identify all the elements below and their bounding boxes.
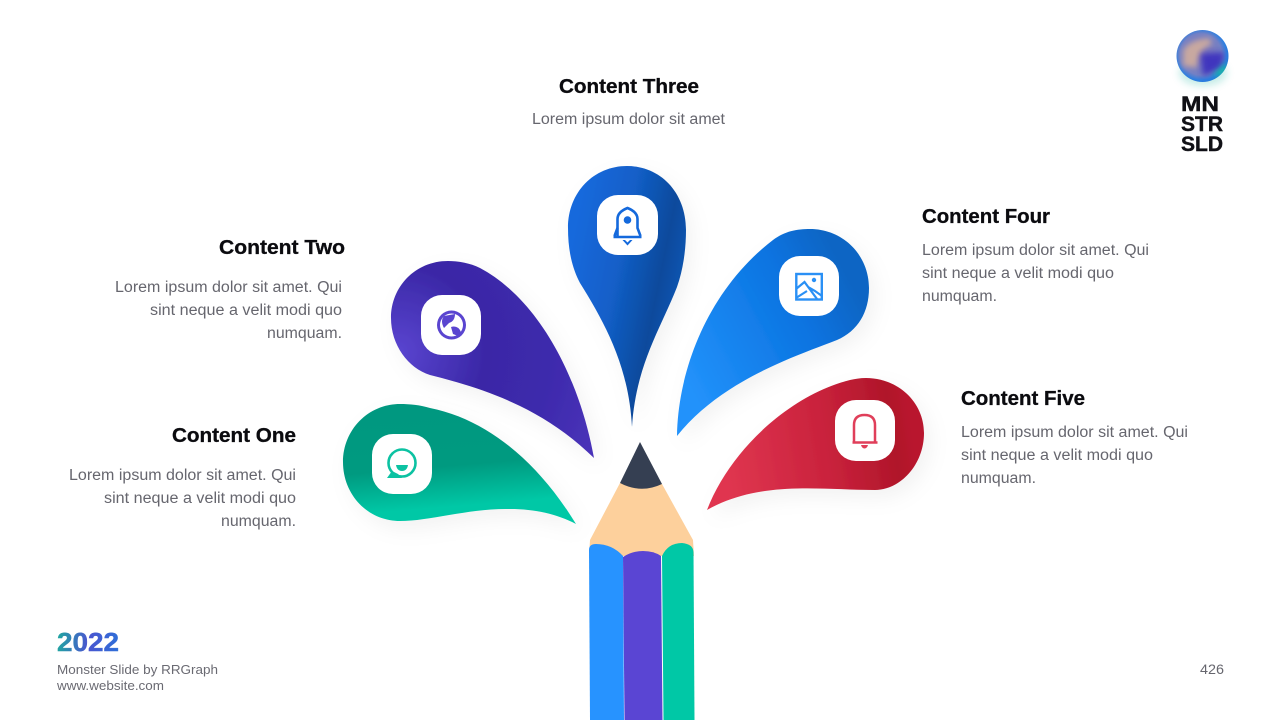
pencil stripe: purple (623, 551, 662, 720)
logo: wordmark: MN (1181, 92, 1219, 116)
logo: sphere (1176, 30, 1228, 86)
text: Content Four body: sint neque a velit modi quo (922, 265, 1114, 282)
text: Content Two body (115, 279, 342, 342)
text: Content Five body: numquam. (961, 470, 1036, 487)
petal: Content One (green) (343, 404, 576, 524)
petal: Content Five (red) (707, 378, 924, 510)
pencil lead (620, 442, 662, 489)
text: Content Two body: numquam. (267, 325, 342, 342)
logo: wordmark: SLD (1181, 132, 1223, 156)
petal: Content Two (purple) (391, 261, 594, 458)
text: Content Four body: numquam. (922, 288, 997, 305)
text: Content One body (69, 467, 296, 530)
heading: Content Three: Content Three (559, 76, 699, 98)
icon: image (779, 256, 839, 316)
petal: Content Three (blue) (568, 166, 686, 427)
heading: Content Four: Content Four (922, 206, 1050, 228)
pencil stripe: blue (589, 544, 624, 720)
text: Content Four body: Lorem ipsum dolor sit amet. Qui (922, 242, 1149, 259)
pencil wood (589, 483, 694, 556)
pencil (589, 442, 694, 720)
icon: chat (372, 434, 432, 494)
text: Content Five body (961, 424, 1188, 487)
footer: credit (56, 662, 218, 693)
heading: Content One: Content One (172, 425, 296, 447)
page number: 426 (1200, 661, 1224, 677)
text: Content Two body: Lorem ipsum dolor sit amet. Qui (115, 279, 342, 296)
petal: Content Four (blue) (677, 229, 869, 436)
text: Content One body: Lorem ipsum dolor sit amet. Qui (69, 467, 296, 484)
text: Content Three body: Lorem ipsum dolor sit amet (532, 111, 726, 128)
text: Content One body: sint neque a velit modi quo (104, 490, 296, 507)
heading: Content Two: Content Two (219, 237, 345, 259)
text: Content One body: numquam. (221, 513, 296, 530)
text: Content Five body: sint neque a velit modi quo (961, 447, 1153, 464)
footer: year: 2022 (57, 627, 119, 657)
text: Content Four body (922, 242, 1149, 305)
icon: globe (421, 295, 481, 355)
text: Content Five body: Lorem ipsum dolor sit amet. Qui (961, 424, 1188, 441)
heading: Content Five: Content Five (961, 388, 1085, 410)
logo: wordmark: STR (1181, 112, 1223, 136)
footer: credit: Monster Slide by RRGraph (57, 662, 218, 677)
logo: wordmark (1181, 92, 1223, 156)
pencil stripe: green (662, 543, 694, 720)
footer: credit: www.website.com (56, 678, 164, 693)
icon: rocket (597, 195, 658, 255)
icon: bell (835, 400, 895, 461)
text: Content Two body: sint neque a velit modi quo (150, 302, 342, 319)
